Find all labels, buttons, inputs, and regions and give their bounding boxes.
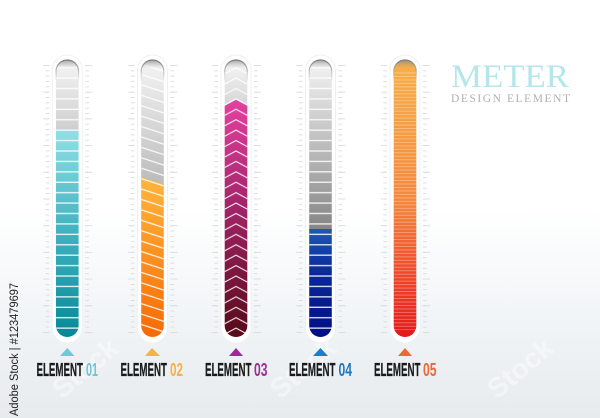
meter: element 01 xyxy=(46,55,89,343)
watermark: Stock xyxy=(481,332,560,405)
label: element 02: 02 xyxy=(170,359,183,380)
label: element 04: 04 xyxy=(338,359,352,380)
watermark: Stock xyxy=(264,332,343,405)
label: element 05: 05 xyxy=(423,359,436,380)
marker: element 02 xyxy=(145,348,160,356)
watermark: Stock xyxy=(46,332,125,405)
marker: element 01 xyxy=(60,348,74,356)
stock id: Adobe Stock | #123479697 xyxy=(9,283,21,416)
title: METER xyxy=(451,59,569,95)
label: element 03: 03 xyxy=(254,359,268,380)
watermark xyxy=(46,153,560,405)
label: element 04: ELEMENT xyxy=(289,359,336,380)
meter: element 04 xyxy=(299,55,342,343)
label: element 05: ELEMENT xyxy=(374,359,421,380)
meter: element 05 xyxy=(384,55,426,343)
marker: element 03 xyxy=(229,348,243,356)
subtitle: DESIGN ELEMENT xyxy=(451,93,570,105)
meter: element 02 xyxy=(131,55,174,343)
label: element 01 xyxy=(36,359,98,380)
watermark: Adobe xyxy=(446,153,533,233)
label: element 03: ELEMENT xyxy=(205,359,252,380)
meter: element 03 xyxy=(215,55,257,343)
marker: element 04 xyxy=(313,348,328,356)
label: element 01: 01 xyxy=(86,359,98,380)
label: element 02: ELEMENT xyxy=(120,359,167,380)
label: element 01: ELEMENT xyxy=(36,359,83,380)
marker: element 05 xyxy=(398,348,412,356)
